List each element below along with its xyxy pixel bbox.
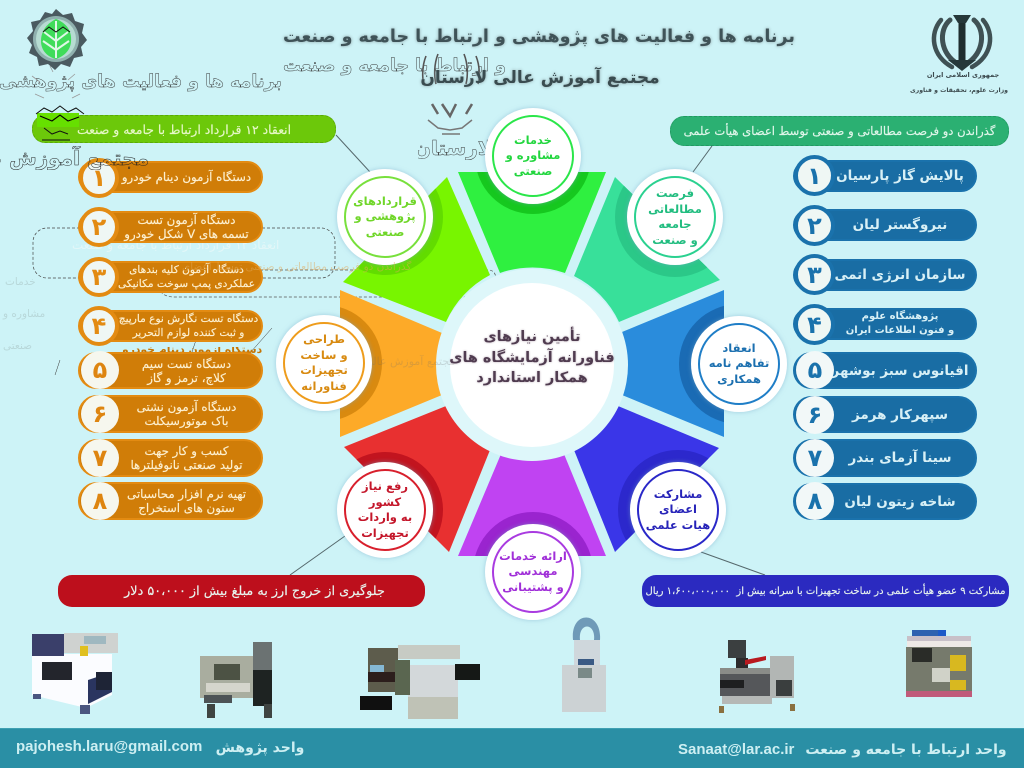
partner row 5 number: ۵: [808, 356, 822, 384]
center circle: [436, 269, 628, 461]
footer bar: [0, 728, 1024, 768]
equipment row 5: [78, 352, 263, 389]
center text: [449, 326, 615, 386]
banner: faculty participation: مشارکت ۹ عضو هیأت علمی در ساخت تجهیزات با سرانه بیش از ۱،۶۰۰،۰۰۰،۰۰۰ ریال: [646, 586, 1006, 596]
partner row 4 number: ۴: [807, 310, 822, 338]
equipment row 7: [78, 439, 263, 477]
circle: contracts: صنعتی: [366, 225, 404, 239]
equipment row 8: ستون های استخراج: [138, 501, 235, 515]
banner: contracts: [32, 115, 336, 143]
logo: Iran emblem: [932, 15, 992, 71]
partner row 6: سپهرکار هرمز: [852, 406, 948, 422]
circle: internship: و صنعت: [652, 232, 698, 246]
equipment row 5: دستگاه تست سیم: [142, 356, 231, 370]
footer: industry email: Sanaat@lar.ac.ir: [678, 741, 794, 758]
circle: design and build: [276, 315, 372, 411]
partner row 7 number: ۷: [808, 444, 822, 472]
partner row 2: نیروگستر لیان: [853, 217, 947, 233]
partner row 2: [793, 209, 977, 241]
circle: contracts: قراردادهای: [353, 194, 417, 208]
partner row 3: [793, 259, 977, 291]
circle: consulting services: مشاوره و: [506, 148, 560, 162]
equipment row 6 number: ۶: [93, 400, 107, 428]
partner row 6 number: ۶: [808, 401, 822, 429]
equipment row 4 number: ۴: [92, 312, 106, 340]
circle: faculty: هیات علمی: [646, 518, 710, 532]
equipment row 1 number: [79, 158, 119, 198]
circle: engineering services: مهندسی: [508, 564, 558, 578]
circle: consulting services: [485, 108, 581, 204]
circle: internship: جامعه: [658, 217, 692, 231]
equipment row 3: عملکردی پمپ سوخت مکانیکی: [118, 278, 255, 290]
partner row 8: شاخه زیتون لیان: [844, 494, 956, 510]
ghost faint caption: خدمات: [5, 276, 36, 288]
banner: foreign exchange: [58, 575, 425, 607]
ghost faint caption 2: مشاوره و: [3, 308, 45, 320]
equipment row 2: دستگاه آزمون تست: [138, 213, 235, 227]
circle: design and build: طراحی: [303, 332, 345, 346]
partner row 4: و فنون اطلاعات ایران: [846, 325, 954, 336]
circle: engineering services: ارائه خدمات: [499, 549, 567, 563]
top wedge: [458, 172, 606, 273]
banner: internships: [670, 116, 1009, 146]
equipment row 7 number: ۷: [93, 444, 107, 472]
equipment row 8 number: ۸: [93, 487, 107, 515]
partner row 7: [793, 439, 977, 477]
logo: university emblem: [27, 9, 87, 70]
equipment row 6: باک موتورسیکلت: [144, 414, 229, 428]
equipment row 1: دستگاه آزمون دینام خودرو: [122, 170, 251, 184]
right wedge: [622, 290, 724, 437]
circle: internship: فرصت: [656, 186, 694, 200]
equipment row 7: تولید صنعتی نانوفیلترها: [130, 458, 243, 472]
partner row 8: [793, 483, 977, 520]
banner: contracts: انعقاد ۱۲ قرارداد ارتباط با جامعه و صنعت: [77, 122, 291, 136]
circle: design and build: فناورانه: [301, 378, 347, 392]
upper right wedge: [574, 177, 720, 322]
circle: design and build: تجهیزات: [300, 363, 348, 377]
machine 3: [360, 645, 480, 719]
partner row 6: [793, 396, 977, 433]
banner: internships: گذراندن دو فرصت مطالعاتی و صنعتی توسط اعضای هیأت علمی: [684, 124, 995, 138]
lower right wedge: [574, 406, 719, 552]
equipment row 4: [78, 310, 263, 342]
partner row 5: اقیانوس سبز بوشهر: [832, 362, 968, 378]
list: equipment: [78, 158, 263, 520]
subtitle: مجتمع آموزش عالی لارستان: [420, 68, 660, 88]
partner row 7 number: [796, 439, 834, 477]
equipment row 1 number: ۱: [92, 164, 106, 192]
partner row 1 number: [794, 155, 835, 196]
machine 2: [200, 642, 272, 718]
circle: faculty: مشارکت: [654, 487, 702, 501]
center text: تأمین نیازهای: [483, 329, 581, 345]
equipment row 2 number: [79, 207, 119, 247]
partner row 1 number: ۱: [807, 162, 822, 190]
connector lines: [290, 135, 765, 575]
circle: MOU: همکاری: [717, 372, 761, 386]
center white disc with text: [450, 283, 614, 447]
ghost faint text: انعقاد ۱۲ قرارداد ارتباط با جامعه و صنعت: [72, 238, 279, 252]
equipment row 4: دستگاه تست نگارش نوع مارپیچ: [119, 313, 258, 325]
equipment row 5: کلاچ، ترمز و گاز: [147, 370, 226, 384]
equipment row 7 number: [81, 439, 119, 477]
partner row 5: [793, 352, 977, 389]
ghost text over equipment rows: دستگاه آزمون دینام خودرو: [122, 343, 262, 356]
partner row 1: [793, 160, 977, 192]
equipment row 6 number: [81, 395, 119, 433]
circle: internship: مطالعاتی: [648, 202, 702, 216]
equipment row 7: کسب و کار جهت: [145, 444, 228, 458]
partner row 5 number: [796, 351, 834, 389]
equipment row 6: [78, 395, 263, 433]
ministry caption: جمهوری اسلامی ایران: [927, 71, 999, 79]
circle: faculty: اعضای: [659, 502, 697, 516]
partner row 4: پژوهشگاه علوم: [862, 311, 938, 322]
equipment row 8: تهیه نرم افزار محاسباتی: [127, 487, 246, 501]
partner row 1: پالایش گاز پارسیان: [836, 168, 964, 184]
circle: import substitution: به واردات: [358, 510, 412, 524]
partner row 3 number: ۳: [807, 260, 822, 288]
equipment row 3 number: [79, 257, 119, 297]
equipment row 4 number: [79, 306, 119, 346]
circle: faculty: [630, 462, 726, 558]
circle: MOU: تفاهم نامه: [709, 356, 769, 370]
footer: research unit: واحد پژوهش: [216, 740, 304, 756]
ministry caption line 2: وزارت علوم، تحقیقات و فناوری: [910, 87, 1008, 94]
equipment row 3: [78, 261, 263, 293]
ghost university emblem: [32, 66, 84, 140]
ghost repeat of title, left part: برنامه ها و فعالیت های پژوهشی: [0, 72, 282, 92]
left wedge: [340, 290, 442, 437]
partner row 2 number: [794, 205, 835, 246]
machine 4: [562, 618, 606, 712]
machine 6: [906, 630, 972, 697]
lower left wedge: [344, 406, 490, 552]
circle: MOU: انعقاد: [722, 341, 756, 355]
equipment row 3 number: ۳: [92, 263, 106, 291]
circle: MOU: [691, 316, 787, 412]
equipment row 4: و ثبت کننده لوازم التحریر: [133, 327, 244, 339]
circle: import substitution: [337, 462, 433, 558]
upper left wedge: [343, 177, 490, 322]
equipment row 8: [78, 482, 263, 520]
circle: internship: [627, 169, 723, 265]
banner: foreign exchange: جلوگیری از خروج ارز به مبلغ بیش از ۵۰،۰۰۰ دلار: [124, 584, 385, 598]
equipment row 1: [78, 161, 263, 193]
equipment row 2: تسمه های V شکل خودرو: [124, 227, 249, 241]
equipment row 3: دستگاه آزمون کلیه بندهای: [129, 264, 244, 276]
ghost orange text near row 3: گذراندن دو فرصت مطالعاتی و صنعتی توسط اعضای: [182, 261, 411, 273]
partner row 4: [793, 308, 977, 340]
ghost Iran emblem: [422, 54, 480, 135]
footer: industry unit: واحد ارتباط با جامعه و صنعت: [805, 742, 1007, 758]
circle: contracts: [337, 169, 433, 265]
ghost faint caption 3: صنعتی: [3, 340, 32, 352]
equipment row 2 number: ۲: [92, 213, 106, 241]
circle: import substitution: کشور: [369, 494, 401, 508]
banner: faculty participation: [642, 575, 1009, 607]
circle: import substitution: رفع نیاز: [362, 479, 408, 493]
machine photos: [32, 618, 972, 719]
machine 5: [719, 640, 795, 713]
partner row 8 number: [796, 482, 834, 520]
partner row 6 number: [796, 396, 834, 434]
wheel diagram: eight wedges: [290, 134, 766, 575]
center text: همکار استاندارد: [476, 370, 588, 386]
circle: design and build: و ساخت: [300, 348, 348, 362]
equipment row 5 number: [81, 351, 119, 389]
equipment row 5 number: ۵: [93, 356, 107, 384]
circle: engineering services: و پشتیبانی: [502, 580, 564, 594]
circle: contracts: پژوهشی و: [354, 209, 416, 223]
equipment row 6: دستگاه آزمون نشتی: [137, 400, 236, 414]
equipment row 8 number: [81, 482, 119, 520]
center text: فناورانه آزمایشگاه های: [449, 350, 615, 366]
title: برنامه ها و فعالیت های پژوهشی و ارتباط با جامعه و صنعت: [283, 27, 795, 47]
partner row 3 number: [794, 254, 835, 295]
footer: research email: pajohesh.laru@gmail.com: [16, 738, 202, 755]
partner row 8 number: ۸: [808, 487, 822, 515]
bottom wedge: [458, 455, 606, 556]
circle: engineering services: [485, 524, 581, 620]
partner row 4 number: [794, 304, 835, 345]
partner row 7: سینا آزمای بندر: [848, 450, 952, 466]
partner row 2 number: ۲: [807, 212, 822, 240]
list: partners: [780, 0, 1024, 530]
circle: consulting services: خدمات: [514, 133, 552, 147]
ghost faint text over left wedge: مجتمع آموزش عالی لارستان: [325, 355, 455, 368]
partner row 3: سازمان انرژی اتمی: [834, 267, 966, 283]
circle: consulting services: صنعتی: [514, 164, 552, 178]
ghost repeat of title, right part: و ارتباط با جامعه و صنعت: [283, 56, 506, 76]
equipment row 2: [78, 211, 263, 243]
machine 1: [32, 633, 118, 714]
circle: import substitution: تجهیزات: [361, 526, 409, 540]
